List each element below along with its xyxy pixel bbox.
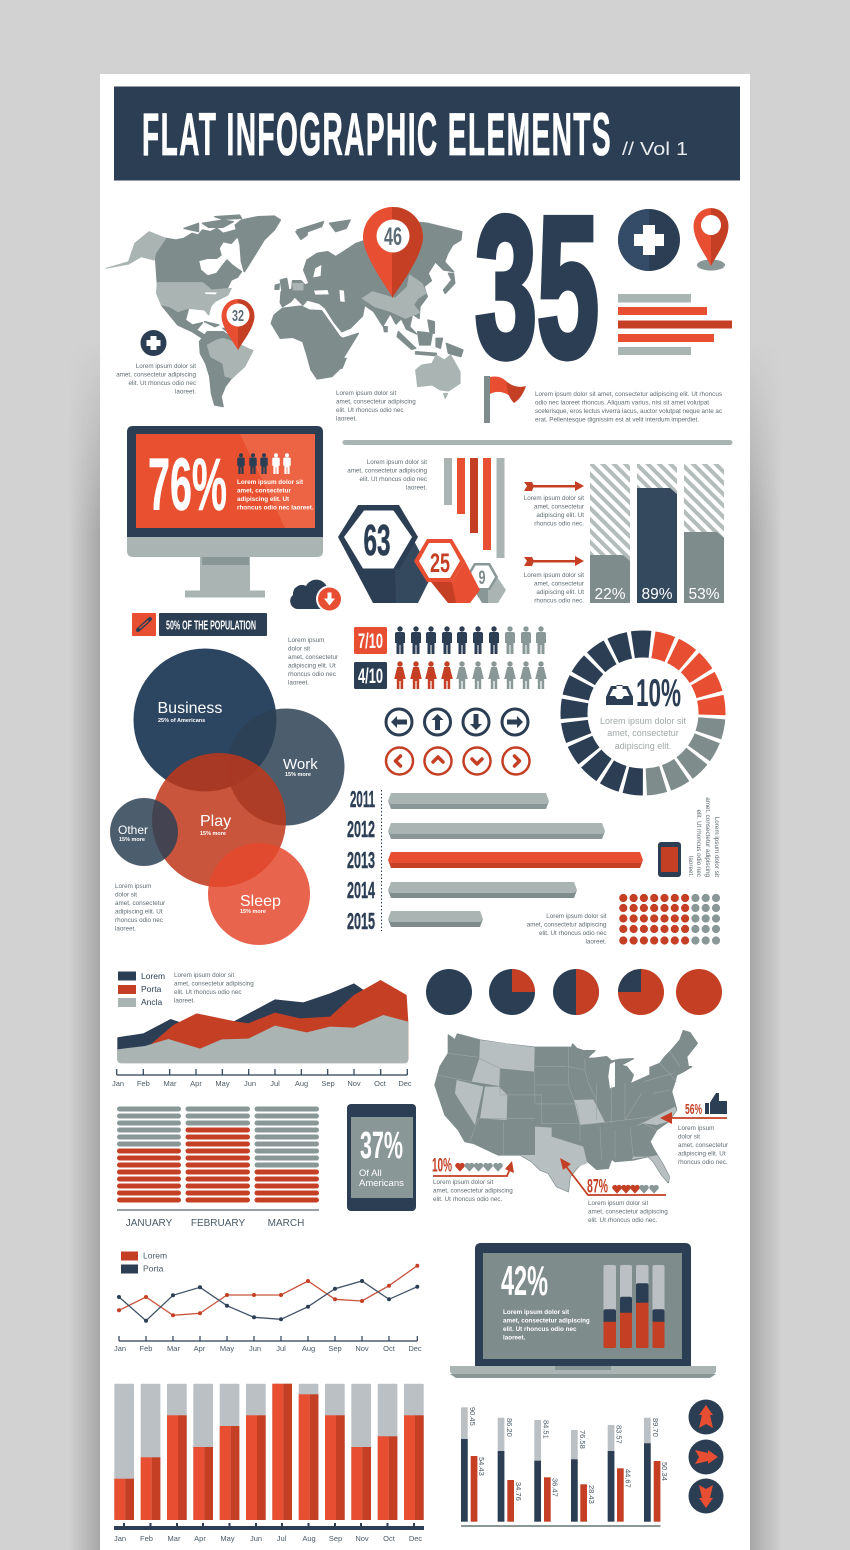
icon: thumbs up [705,1093,727,1114]
text: hexagon note: elit. Ut rhoncus odio nec [359,476,427,483]
text: dots note: amet, consectetur adipiscing [527,922,607,928]
line chart: Feb [140,1344,152,1353]
text: flag note: erat. Pellentesque dignissim est at velit interdum imperdiet. [535,416,699,424]
text: area chart note: amet, consectetur adipiscing [174,980,254,988]
callout: 56%: 56% [685,1101,702,1118]
area chart axis: Aug [295,1079,308,1088]
badge 7/10: 7/10 [358,630,383,653]
area chart legend: Lorem [141,971,165,981]
icon: location pin [694,208,728,270]
monitor text: rhoncus odio nec laoreet. [237,504,314,512]
text: flag note: scelerisque, eros lectus viverra lacus, auctor volutpat neque ante ac [535,408,722,415]
text: hexagon note: Lorem ipsum dolor sit [367,459,427,466]
Work label: 15% more [285,772,311,778]
Sleep label: 15% more [240,909,266,915]
rotated value labels: 28.43 [587,1485,596,1504]
hexagon 63 [338,505,432,603]
laptop text: laoreet. [503,1334,526,1342]
Other label: Other [118,823,148,837]
hexagon 25 [414,539,480,603]
text: dots note: elit. Ut rhoncus odio nec [539,930,606,937]
text: arrow 1 note: Lorem ipsum dolor sit [524,495,584,502]
stacked bar chart: Jun [250,1534,262,1543]
area chart [117,980,408,1063]
text: rotated note: elit. Ut rhoncus odio nec [695,809,702,877]
text: map middle note: Lorem ipsum dolor sit [336,390,396,397]
pin: 32 [222,299,254,350]
callout: 56%: adipiscing elit. Ut [678,1150,726,1158]
icons: arrow buttons [386,709,528,735]
icons: chevron buttons [386,748,530,774]
text: map left note: laoreet. [175,388,196,396]
area chart axis: Sep [321,1079,335,1088]
line chart: Sep [328,1344,342,1353]
line chart legend [121,1250,167,1274]
Business label: Business [158,700,222,717]
area chart axis: May [215,1079,230,1088]
laptop text: elit. Ut rhoncus odio nec [503,1326,577,1333]
rotated value labels: 50.34 [660,1462,669,1481]
callout: 10%: elit. Ut rhoncus odio nec. [433,1196,503,1203]
monitor text: Lorem ipsum dolor sit [237,479,304,486]
text: map middle note: laoreet. [336,416,357,422]
stacked bar chart: Nov [355,1534,369,1543]
page sheet [100,74,750,1550]
line chart legend: Porta [143,1264,164,1274]
hatched percentage columns: 53% [688,586,720,603]
year labels: 2014 [347,877,375,903]
text: venn right note: Lorem ipsum [288,637,324,644]
Other label: 15% more [119,837,145,843]
donut text: amet, consectetur [607,728,679,738]
hatched percentage columns: 89% [641,586,673,603]
icon: inbox [606,685,633,705]
badge 4/10 [354,662,387,689]
donut text: Lorem ipsum dolor sit [600,716,687,726]
venn diagram [110,648,344,945]
callout: 87%: amet, consectetur adipiscing [588,1208,668,1216]
tablet 37%: Of All [359,1168,382,1179]
area chart axis: Jul [270,1079,280,1088]
stacked bar chart: Aug [302,1534,316,1543]
callout: 10%: amet, consectetur adipiscing [433,1188,513,1194]
area chart axis: Mar [164,1079,177,1088]
laptop stacked columns [604,1265,664,1348]
text: map left note: Lorem ipsum dolor sit [136,363,196,370]
stacked bar chart: Jan [114,1534,126,1543]
pin: 46: 46 [384,223,402,251]
line chart: Jul [276,1344,286,1353]
month labels [126,1218,304,1229]
rotated value labels: 86.20 [505,1418,514,1437]
text: rotated note: amet, consectetur adipiscing [704,797,711,877]
pin: 32: 32 [232,308,244,325]
area chart axis: Apr [190,1079,202,1088]
stacked bar chart: Jul [277,1534,287,1543]
stacked bar chart: Dec [409,1534,422,1543]
divider bar [342,440,732,445]
donut chart 10% [564,634,722,792]
icon: phone [658,842,681,877]
line chart [114,1264,422,1353]
text: dots note: laoreet. [585,938,607,946]
callout: 56% [660,1093,728,1166]
hexagon 25: 25 [430,548,450,578]
year labels: 2015 [347,908,375,934]
text: venn left note: laoreet. [115,926,136,932]
76%: 76% [148,443,227,526]
line chart: May [220,1344,234,1353]
USA map [435,1031,697,1192]
laptop 42% [450,1243,716,1378]
ribbon: 50% of the population [132,613,267,636]
people icons [237,453,291,474]
text: venn left note: amet, consectetur [115,900,165,907]
area chart axis [112,1069,412,1088]
text: flag note: Lorem ipsum dolor sit amet, consectetur adipiscing elit. Ut rhoncus [535,391,722,398]
text: venn left note: adipiscing elit. Ut [115,908,163,916]
badge 4/10: 4/10 [358,665,383,688]
line chart: Mar [167,1344,180,1353]
text: hexagon note: laoreet. [406,484,427,492]
stacked bar chart: Sep [329,1534,342,1543]
month labels: MARCH [268,1218,304,1229]
10%: 10% [636,672,681,715]
hatched percentage columns: 22% [594,586,626,603]
text: area chart note: laoreet. [174,998,195,1004]
icon: round arrows [688,1400,724,1514]
subtitle: // Vol 1 [622,139,688,159]
icon: cloud download [290,580,343,612]
area chart legend: Ancla [141,997,163,1007]
text: arrow 2 note: amet, consectetur [534,580,584,588]
monitor [127,426,323,598]
text: arrow 1 note: amet, consectetur [534,504,584,510]
people row: women [394,661,547,689]
striped monthly bars [117,1109,319,1210]
rotated value labels: 34.76 [514,1482,523,1501]
callout: 87%: elit. Ut rhoncus odio nec. [588,1217,658,1224]
stacked bar chart [114,1384,424,1543]
Work label: Work [283,756,318,773]
year labels: 2012 [347,816,375,842]
icon: big plus [618,209,680,271]
pin: 46 [363,207,423,298]
ribbon: 50% of the population: 50% OF THE POPULATION [166,618,256,632]
area chart axis: Feb [137,1079,150,1088]
month labels: JANUARY [126,1218,173,1229]
stacked bar chart: Feb [140,1534,153,1543]
stacked bar chart: May [220,1534,235,1543]
rotated value labels: 44.67 [624,1469,632,1488]
stacked bar chart: Mar [168,1534,181,1543]
line chart: Nov [355,1344,369,1353]
area chart axis: Nov [347,1079,361,1088]
laptop text: Lorem ipsum dolor sit [503,1309,570,1316]
text: venn left note: dolor sit [115,892,137,898]
text: venn right note: dolor sit [288,646,310,652]
line chart: Apr [194,1344,206,1353]
big number 35: 35 [475,176,599,399]
area chart legend [118,971,165,1007]
callout: 10%: 10% [432,1156,452,1176]
line chart: Dec [408,1344,422,1353]
rotated value labels: 36.47 [550,1478,560,1497]
rotated value labels: 54.43 [477,1457,486,1476]
icon: small plus [140,330,166,356]
text: arrow 1 note: rhoncus odio nec. [534,520,584,528]
horizontal mini bars [618,294,732,355]
text: map left note: amet, consectetur adipiscing [116,372,196,378]
text: venn right note: amet, consectetur [288,654,338,661]
rotated value labels: 76.58 [578,1430,587,1449]
text: map middle note: elit. Ut rhoncus odio nec [336,407,404,414]
tablet 37%: Americans [359,1178,404,1189]
stacked bar chart: Apr [194,1534,206,1543]
tablet 37%: 37% [360,1125,403,1167]
text: area chart note: elit. Ut rhoncus odio nec [174,989,242,996]
text: venn left note: Lorem ipsum [115,883,151,890]
text: venn right note: laoreet. [288,680,309,686]
Business label: 25% of Americans [158,718,205,724]
area chart legend: Porta [141,984,162,994]
people row: men [395,626,546,654]
42%: 42% [501,1257,548,1304]
text: hexagon note: amet, consectetur adipiscing [347,468,427,474]
callout: 56%: amet, consectetur [678,1142,728,1149]
text: flag note: odio nec laoreet rhoncus. Aliquam varius, nisi sit amet volutpat [535,400,709,406]
callout: 10% [432,1156,514,1203]
area chart axis: Jun [244,1079,256,1088]
text: dots note: Lorem ipsum dolor sit [546,913,607,920]
laptop text: amet, consectetur adipiscing [503,1318,590,1324]
text: venn right note: adipiscing elit. Ut [288,662,336,670]
hexagon 9 [466,563,506,603]
callout: 10%: Lorem ipsum dolor sit [433,1179,493,1186]
vertical drop bars [444,458,504,558]
text: arrow 2 note: Lorem ipsum dolor sit [524,572,584,579]
text: rotated note: Lorem ipsum dolor sit [713,817,720,877]
callout: 87% [560,1158,668,1224]
year labels [347,786,375,934]
line chart: Jan [114,1344,126,1353]
area chart axis: Dec [398,1079,412,1088]
donut text: adipiscing elit. [615,741,671,751]
text: arrow 1 note: adipiscing elit. Ut [536,512,584,519]
line chart legend: Lorem [143,1250,167,1260]
monitor text: amet, consectetur [237,488,291,494]
year labels: 2013 [347,847,375,873]
callout: 87%: 87% [587,1176,608,1198]
rotated value labels: 84.51 [542,1420,550,1439]
tablet 37% [347,1104,416,1211]
hexagon 63: 63 [364,516,390,565]
callout: 56%: dolor sit [678,1134,700,1140]
paired bar chart [461,1407,669,1527]
text: map middle note: amet, consectetur adipiscing [336,398,416,406]
area chart axis: Jan [112,1079,124,1088]
hatched percentage columns [590,464,724,603]
callout: 56%: rhoncus odio nec. [678,1159,728,1166]
Play label: Play [200,813,231,830]
rotated value labels: 89.70 [651,1418,660,1437]
stacked bar chart: Oct [383,1534,396,1543]
text: arrow 2 note: rhoncus odio nec. [534,598,584,604]
rotated value labels [468,1407,669,1504]
icon: flag [484,376,526,423]
timeline bars 2011-2015 [347,786,643,934]
world map [106,215,463,407]
text: venn right note: rhoncus odio nec [288,671,336,678]
line chart: Oct [383,1344,396,1353]
callout: 56%: Lorem ipsum [678,1125,714,1132]
rotated value labels: 90.45 [468,1407,477,1426]
text: arrow 2 note: adipiscing elit. Ut [536,589,584,596]
monitor text: adipiscing elit. Ut [237,496,290,503]
arrow 2 [524,556,584,566]
Play label: 15% more [200,831,226,837]
hexagon 9: 9 [478,568,486,589]
arrow 1 [524,481,584,491]
dot matrix [623,898,719,940]
year labels: 2011 [350,786,375,812]
text: venn left note: rhoncus odio nec [115,917,163,924]
pie row [426,969,722,1015]
text: map left note: elit. Ut rhoncus odio nec [128,380,196,387]
month labels: FEBRUARY [191,1218,245,1229]
title banner [114,86,740,180]
Sleep label: Sleep [240,893,281,910]
text: rotated note: laoreet. [687,856,694,877]
callout: 87%: Lorem ipsum dolor sit [588,1200,648,1207]
text: rotated note [687,797,720,877]
area chart axis: Oct [374,1079,387,1088]
rotated value labels: 83.57 [614,1425,624,1444]
line chart: Jun [249,1344,261,1353]
text: area chart note: Lorem ipsum dolor sit [174,972,234,979]
line chart: Aug [302,1344,315,1353]
badge 7/10 [354,627,387,654]
